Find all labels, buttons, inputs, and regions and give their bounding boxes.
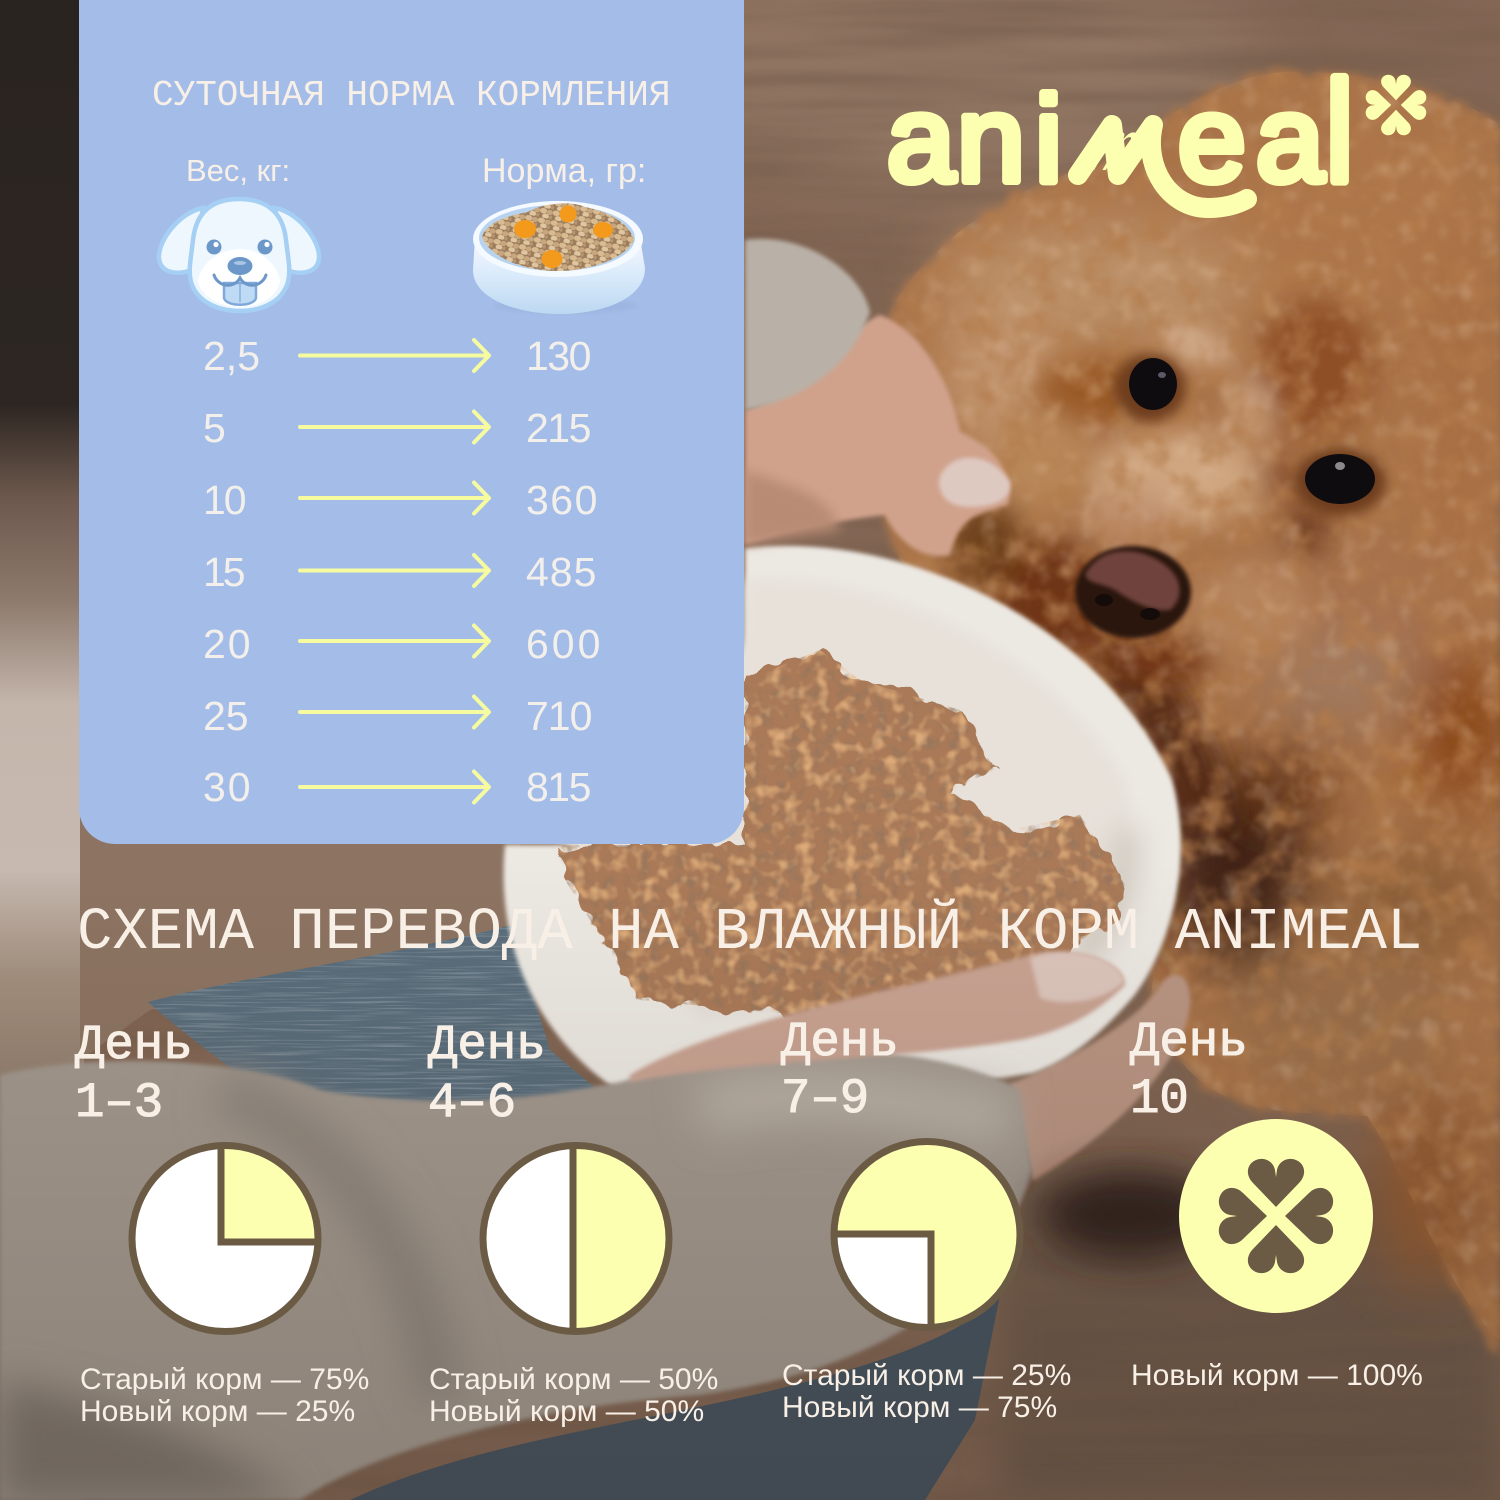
row 15 to 485: 15 (203, 549, 245, 595)
photo: white bowl with wet food (504, 546, 1181, 1100)
table rows: weight, arrow, norm (203, 333, 603, 810)
logo: slanted letter m with swoosh (1078, 108, 1247, 208)
row 2,5 to 130: 2,5 (203, 333, 260, 379)
logo: clover asterisk (1366, 75, 1426, 135)
row 10 to 360: 360 (526, 477, 599, 523)
row 20 to 600 (203, 621, 603, 667)
row 5 to 215: 5 (203, 405, 226, 451)
pie chart: 25 percent new (132, 1146, 318, 1332)
panel title: СУТОЧНАЯ НОРМА КОРМЛЕНИЯ (152, 75, 670, 116)
row 25 to 710: 25 (203, 693, 249, 739)
pie chart: 50 percent new (483, 1146, 669, 1332)
row 10 to 360: 10 (203, 477, 246, 523)
day label: 10 (1130, 1071, 1189, 1127)
day label: 1–3 (75, 1075, 163, 1131)
icon: puppy head (159, 199, 319, 311)
row 25 to 710: 710 (526, 693, 592, 739)
row 2,5 to 130 (203, 333, 591, 379)
row 20 to 600: 600 (526, 621, 603, 667)
day label: День (781, 1014, 899, 1070)
column heading: norm: Норма, гр: (482, 152, 646, 190)
row 15 to 485: 485 (526, 549, 597, 595)
panel: daily feeding norm (79, 0, 744, 844)
logo: letters ani: ani (887, 71, 1062, 207)
photo: upper hand with sock (745, 239, 1010, 556)
column heading: weight: Вес, кг: (186, 153, 290, 188)
ratio text: Старый корм — 75% (80, 1363, 369, 1396)
logo: letters ea: ea (1178, 71, 1324, 207)
row 30 to 815 (203, 764, 591, 810)
photo: darkening toward the bottom (0, 860, 1500, 1500)
day label: 7–9 (781, 1071, 869, 1127)
row 15 to 485 (203, 549, 597, 595)
ratio text: Новый корм — 25% (80, 1395, 355, 1428)
logo: animeal (887, 53, 1426, 212)
pie chart: 75 percent new (834, 1142, 1020, 1328)
row 30 to 815: 30 (203, 764, 253, 810)
photo: person's hair and sweater on the left (0, 0, 520, 1500)
row 25 to 710 (203, 693, 592, 739)
row 10 to 360 (203, 477, 599, 523)
heading: transition scheme: СХЕМА ПЕРЕВОДА НА ВЛАЖНЫЙ КОРМ ANIMEAL (77, 898, 1422, 966)
row 20 to 600: 20 (203, 621, 253, 667)
day label: День (428, 1017, 546, 1073)
ratio text: Новый корм — 75% (782, 1391, 1057, 1424)
icon: bowl of food (473, 201, 645, 314)
icon: full circle with clover (1179, 1119, 1373, 1313)
column: days 1–3 (75, 1017, 369, 1428)
logo: letter l: l (1326, 53, 1353, 212)
day label: День (75, 1017, 193, 1073)
photo: thumb of the lower hand (630, 952, 1220, 1260)
column: days 4–6 (428, 1017, 718, 1428)
photo: jeans (148, 925, 1000, 1500)
photo: dog (850, 72, 1500, 1355)
ratio text: Старый корм — 25% (782, 1359, 1071, 1392)
row 5 to 215: 215 (526, 405, 591, 451)
photo: dog's right eye (1294, 448, 1386, 516)
column: day 10 (1130, 1014, 1423, 1392)
day label: День (1130, 1014, 1248, 1070)
row 5 to 215 (203, 405, 591, 451)
ratio text: Новый корм — 100% (1131, 1359, 1423, 1392)
photo: dog's left eye (1114, 354, 1186, 422)
photo: dog's nose (1075, 546, 1191, 638)
ratio text: Старый корм — 50% (429, 1363, 718, 1396)
day label: 4–6 (428, 1075, 516, 1131)
photo: sweater sleeve (0, 1051, 1032, 1500)
column: days 7–9 (781, 1014, 1071, 1424)
row 2,5 to 130: 130 (526, 333, 591, 379)
photo: lower hand palm behind the bowl (1010, 975, 1190, 1181)
row 30 to 815: 815 (526, 764, 591, 810)
logo: slanted letter m with swoosh: m (1079, 108, 1156, 185)
ratio text: Новый корм — 50% (429, 1395, 704, 1428)
